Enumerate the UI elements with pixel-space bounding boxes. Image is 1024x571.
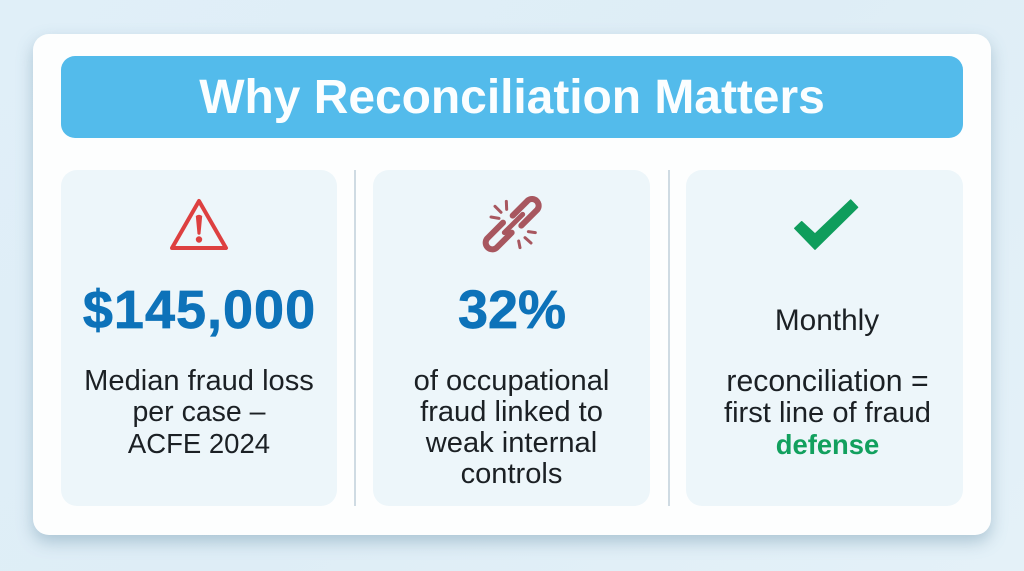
description: median fraud loss: ACFE 2024 [128,428,270,459]
description: median fraud loss [84,364,314,459]
description: occupational fraud: of occupational [414,364,609,396]
description: occupational fraud: controls [461,458,562,490]
description: first line of defense: defense [776,429,879,460]
description: occupational fraud [414,364,609,490]
divider [354,170,356,506]
stat: 32%: 32% [458,280,566,340]
stat: $145,000: $145,000 [83,280,316,340]
description: occupational fraud: weak internal [426,427,597,459]
icon: warning triangle [170,198,228,250]
description: median fraud loss: Median fraud loss [84,364,314,396]
panel: monthly reconciliation [686,170,963,506]
description: median fraud loss: per case – [132,396,266,428]
description: first line of defense [724,364,931,460]
panel: fraud loss [61,170,337,506]
divider [668,170,670,506]
icon: green check mark [794,199,858,250]
description: first line of defense: first line of fraud [724,397,931,429]
description: first line of defense: reconciliation = [726,364,929,398]
title banner: Why Reconciliation Matters [199,71,825,124]
description: occupational fraud: fraud linked to [420,396,603,428]
panel: weak controls [373,170,650,506]
label: monthly: Monthly [775,304,879,337]
title banner [61,56,963,138]
icon: broken chain link [482,196,542,252]
